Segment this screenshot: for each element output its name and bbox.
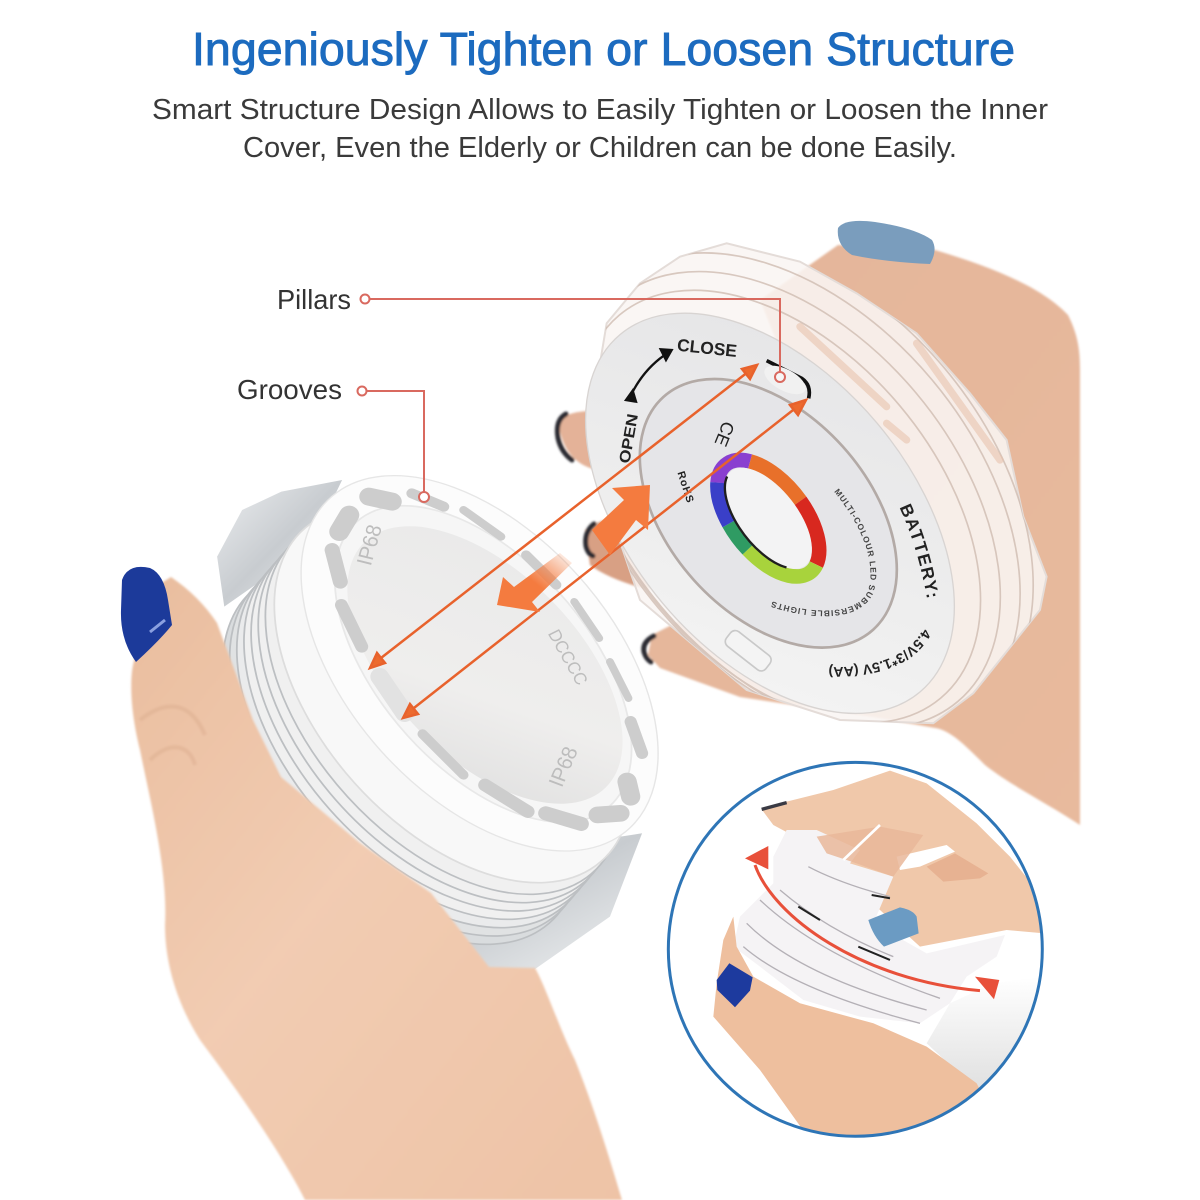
thumb nail dark blue	[717, 963, 753, 1007]
title: Ingeniously Tighten or Loosen Structure	[192, 23, 1015, 75]
faint moulded marks: IP68	[544, 744, 583, 790]
lid white highlight	[843, 825, 880, 860]
label: Pillars: Pillars	[277, 284, 351, 315]
threaded body	[151, 446, 703, 1005]
printed face	[513, 245, 1027, 782]
nail three	[644, 636, 654, 662]
lower hand	[713, 917, 993, 1140]
label: Grooves	[237, 374, 429, 502]
left device: white inner cover	[151, 415, 729, 1005]
faint moulded marks: IP68	[353, 522, 387, 568]
faint moulded marks	[353, 522, 592, 790]
big orange arrow towards lid	[592, 485, 650, 555]
rim thread lines	[606, 252, 1034, 723]
clear crystal rim	[597, 243, 1047, 723]
right lid: clear lid with printed face	[584, 242, 1048, 724]
lid printed labels	[576, 335, 938, 678]
guide line: two-way orange arrows	[370, 365, 806, 718]
gaps between fingers	[897, 845, 955, 870]
white top ring	[230, 415, 729, 912]
thumb nail	[121, 567, 172, 662]
lid printed labels: OPEN	[617, 412, 642, 465]
right hand holding lid	[557, 245, 1080, 825]
subtitle text	[152, 94, 1048, 164]
lid printed labels: CE	[710, 419, 738, 449]
lid printed labels: BATTERY:	[900, 504, 938, 598]
finger tip two	[585, 515, 650, 590]
lid tab	[723, 628, 774, 673]
label: Pillars	[277, 284, 785, 382]
crystal base bottom	[381, 833, 642, 972]
nail one	[557, 414, 572, 460]
ring inner ridge	[277, 457, 690, 871]
thumb crease	[140, 706, 205, 765]
lid printed labels: RoHS	[674, 470, 696, 505]
finger nail top	[762, 803, 787, 809]
inset circle: twisting demonstration	[668, 762, 1043, 1140]
open close arrow	[626, 349, 672, 402]
cover slots	[332, 493, 642, 824]
colour ring	[698, 442, 839, 594]
upper hand	[762, 771, 1043, 947]
big orange arrow towards cover	[497, 553, 572, 612]
nail two	[586, 524, 594, 556]
inner frosted disc	[296, 481, 674, 849]
top finger nail	[838, 221, 935, 264]
grey shadow under device	[926, 1006, 1032, 1088]
lid printed labels: 4.5V/3*1.5V (AA)	[829, 630, 930, 678]
pillar slot	[767, 361, 809, 398]
palm and top finger	[648, 245, 1080, 825]
inner disc	[589, 330, 947, 697]
label: Grooves: Grooves	[237, 374, 342, 405]
reddish reflection in lid	[817, 827, 923, 877]
palm and thumb	[131, 577, 622, 1200]
crystal base corner	[217, 480, 342, 607]
lid printed labels: CLOSE	[676, 335, 738, 361]
lid printed labels: MULTI-COLOUR LED SUBMERSIBLE LIGHTS	[771, 488, 876, 616]
inset border	[668, 762, 1042, 1136]
red rotation arrow	[745, 846, 999, 999]
subtitle text: Cover, Even the Elderly or Children can be done Easily.	[243, 132, 957, 164]
finger tip one	[558, 411, 625, 480]
thumb nail grey blue	[868, 907, 919, 947]
subtitle text: Smart Structure Design Allows to Easily Tighten or Loosen the Inner	[152, 94, 1048, 126]
thread lines	[743, 867, 940, 1023]
crystal lid	[733, 830, 1005, 1023]
left hand holding cover	[131, 577, 622, 1200]
skin streaks through rim	[800, 327, 1000, 460]
faint moulded marks: DCCCC	[544, 626, 592, 688]
